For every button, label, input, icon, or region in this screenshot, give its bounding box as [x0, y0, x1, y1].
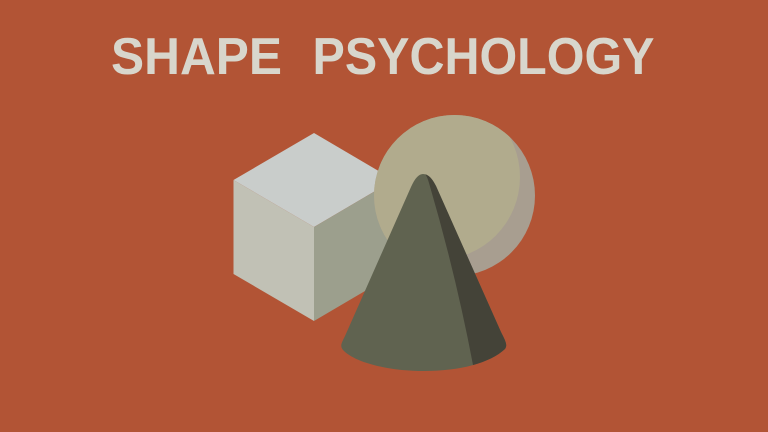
icon: cone: [341, 174, 506, 371]
title: [111, 28, 654, 86]
icon: sphere: [374, 115, 535, 274]
infographic canvas: [112, 38, 654, 371]
title: SHAPE: [111, 28, 282, 86]
icon: cube: [234, 133, 394, 321]
title: PSYCHOLOGY: [312, 28, 654, 86]
